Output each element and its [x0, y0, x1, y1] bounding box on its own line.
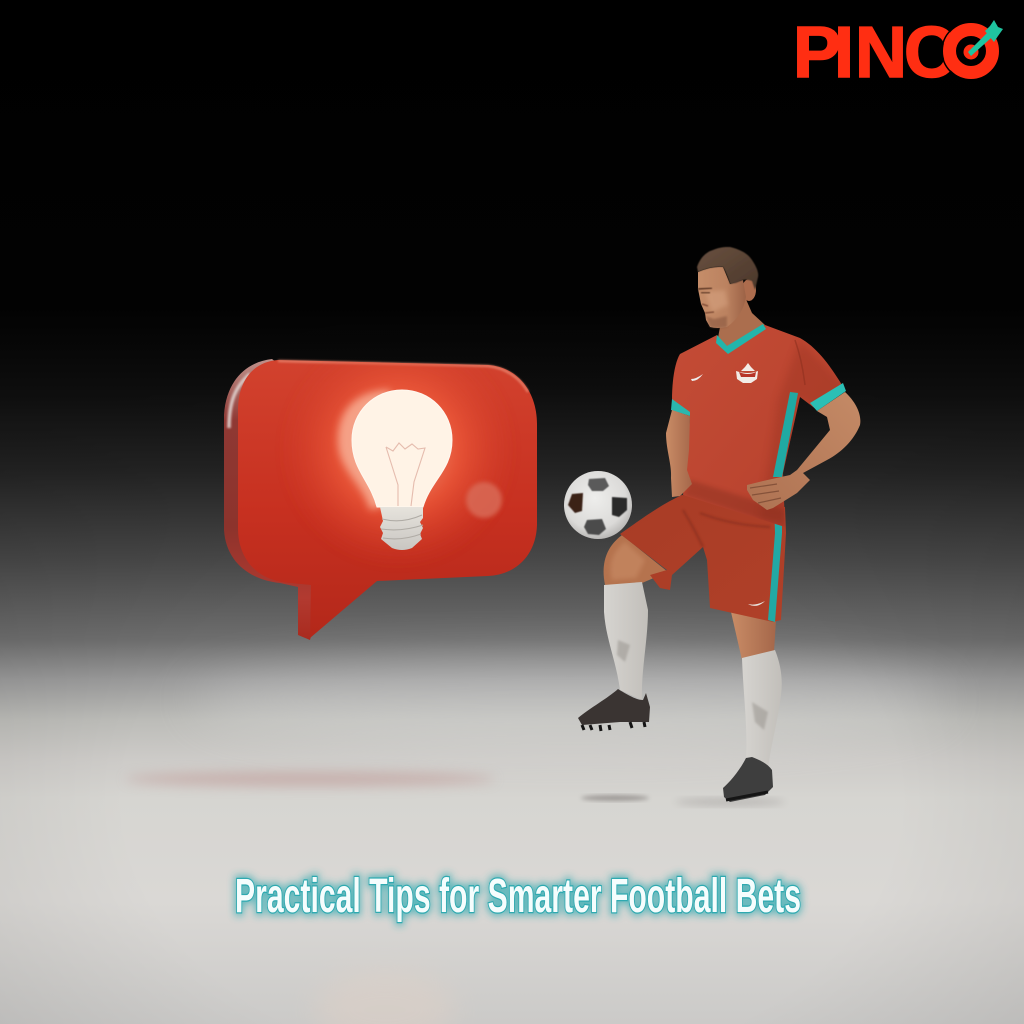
jersey teal collar [716, 324, 766, 354]
lens flare [466, 482, 502, 518]
logo: PINCO [793, 13, 1003, 93]
title [235, 870, 801, 923]
soccer player [564, 247, 860, 802]
raised leg boot [578, 689, 650, 731]
logo arrow [968, 20, 1003, 56]
raised thigh and knee [604, 535, 668, 585]
logo target on letter O [942, 22, 1000, 80]
nose and mouth [702, 304, 714, 313]
ball panels [568, 478, 627, 535]
neck [717, 297, 765, 352]
jaw shadow [706, 316, 727, 328]
bubble front face [238, 360, 537, 638]
bubble side highlight [229, 374, 250, 428]
bulb glow halo [305, 362, 490, 548]
standing leg sock [742, 650, 782, 768]
face [698, 267, 746, 328]
standing leg [731, 612, 776, 660]
bulb screw base [380, 507, 423, 550]
bubble side edge [224, 359, 320, 640]
light bulb glass [352, 390, 452, 507]
jersey far cuff [671, 399, 690, 416]
speech bubble with light bulb [224, 330, 537, 640]
jersey teal side stripe [773, 392, 798, 477]
cheek light [705, 290, 728, 312]
logo wordmark: PINCO [793, 13, 999, 93]
far arm and hand [666, 410, 692, 497]
hair [697, 247, 758, 290]
head [697, 247, 758, 328]
jersey shading [684, 340, 850, 527]
floor shadow of speech bubble [125, 772, 495, 786]
shorts folds [683, 510, 770, 547]
jersey swoosh [691, 374, 703, 381]
bulb filament [386, 443, 425, 506]
raised leg sock [604, 582, 648, 700]
shorts [620, 495, 786, 622]
standing leg boot [723, 757, 773, 802]
jersey crest [736, 363, 758, 383]
bubble top highlight [278, 361, 528, 392]
soccer ball [564, 471, 632, 539]
ear [742, 279, 756, 301]
shorts swoosh [748, 601, 765, 606]
brow and eye [698, 288, 712, 293]
jersey near cuff [810, 383, 846, 411]
jersey [671, 324, 850, 527]
near arm and hand [747, 392, 860, 510]
near hand fingers [750, 484, 781, 503]
floor shadow of player [581, 795, 785, 806]
bulb offset glow [338, 390, 400, 510]
shorts teal stripe [768, 503, 782, 622]
